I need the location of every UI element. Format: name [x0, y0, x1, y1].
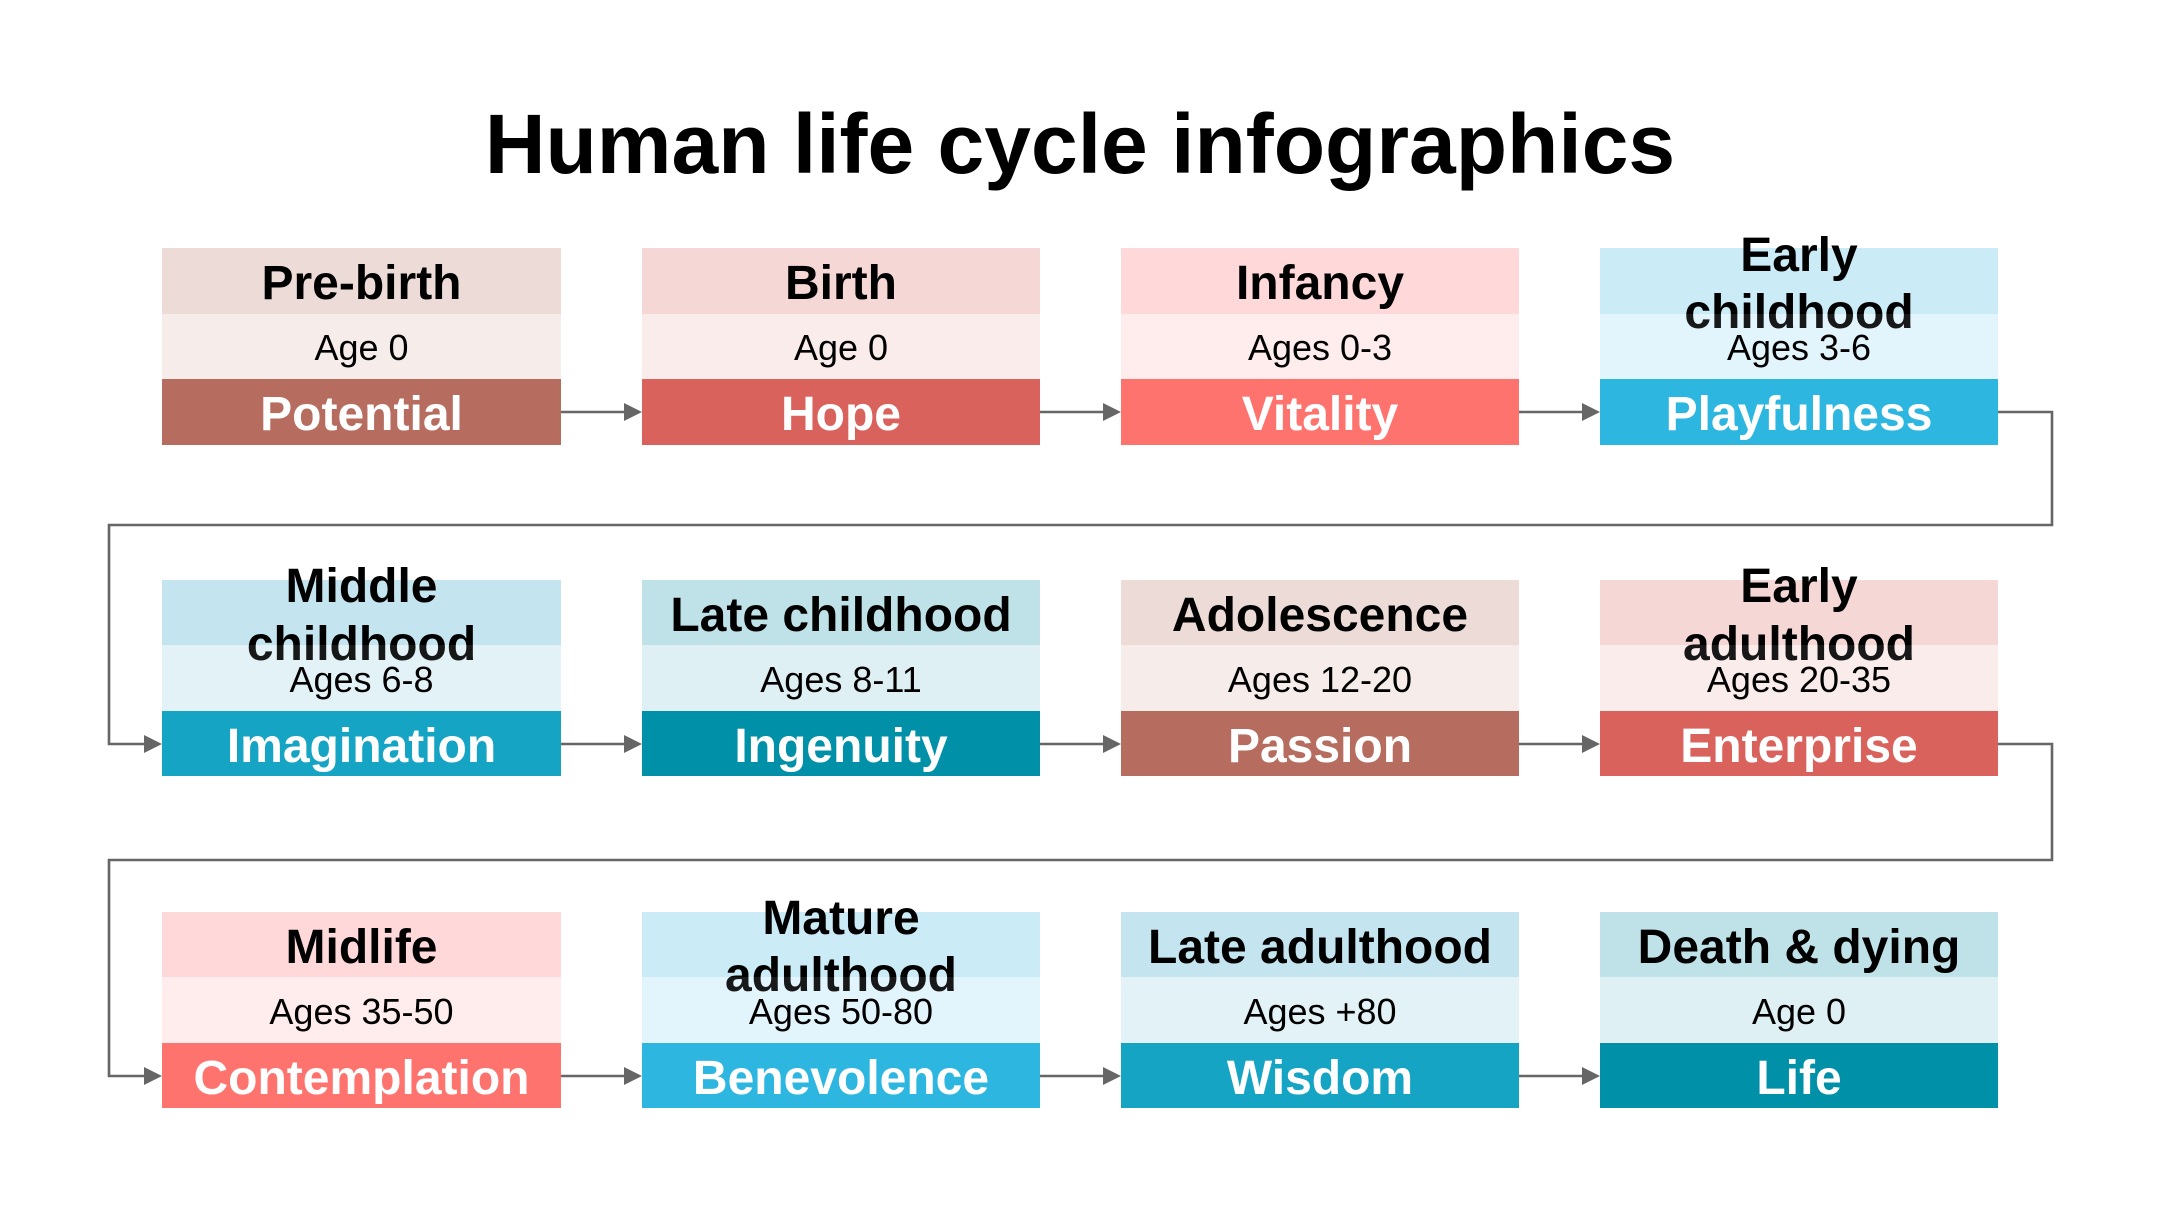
panel: infancy: Infancy	[1236, 257, 1404, 310]
panel: midlife: Contemplation	[194, 1052, 529, 1105]
panel: middle childhood: Imagination	[227, 720, 496, 773]
panel: late childhood: Late childhood	[670, 589, 1012, 642]
arrow: birth to infancy	[1040, 403, 1121, 421]
panel: death and dying: Death & dying	[1638, 921, 1960, 974]
panel: late childhood: Ages 8-11	[760, 659, 922, 700]
panel: pre-birth: Age 0	[314, 327, 409, 368]
panel: early childhood: childhood	[1684, 286, 1914, 339]
panel: adolescence: Passion	[1228, 720, 1412, 773]
panel: death and dying: Life	[1756, 1052, 1842, 1105]
arrow: late adulthood to death and dying	[1519, 1067, 1600, 1085]
panel: early childhood	[1600, 229, 1998, 445]
arrow: pre-birth to birth	[561, 403, 642, 421]
panel: early adulthood: Enterprise	[1680, 720, 1918, 773]
panel: late adulthood: Late adulthood	[1148, 921, 1492, 974]
panel: early adulthood	[1600, 560, 1998, 776]
panel: pre-birth: Pre-birth	[261, 257, 462, 310]
panel: mature adulthood	[642, 892, 1040, 1108]
panel: infancy	[1121, 248, 1519, 445]
arrow: mature adulthood to late adulthood	[1040, 1067, 1121, 1085]
arrow: early childhood to middle childhood	[109, 412, 2052, 753]
panel: early adulthood: Ages 20-35	[1707, 659, 1891, 700]
panel: adolescence	[1121, 580, 1519, 776]
arrow: adolescence to early adulthood	[1519, 735, 1600, 753]
panel: early childhood: Early	[1740, 229, 1858, 282]
panel: pre-birth: Potential	[260, 388, 463, 441]
panel: middle childhood	[162, 560, 561, 776]
panel: mature adulthood: Ages 50-80	[749, 991, 933, 1032]
panel: early adulthood: adulthood	[1683, 618, 1915, 671]
panel: adolescence: Ages 12-20	[1228, 659, 1412, 700]
panel: late adulthood: Wisdom	[1227, 1052, 1413, 1105]
panel: late childhood	[642, 580, 1040, 776]
panel: death and dying: Age 0	[1752, 991, 1846, 1032]
panel: early childhood: Ages 3-6	[1727, 327, 1871, 368]
panel: early childhood: Playfulness	[1666, 388, 1932, 441]
panel: late adulthood: Ages +80	[1243, 991, 1397, 1032]
arrow: infancy to early childhood	[1519, 403, 1600, 421]
panel: birth: Age 0	[794, 327, 888, 368]
panel: mature adulthood: adulthood	[725, 949, 957, 1002]
arrow: middle childhood to late childhood	[561, 735, 642, 753]
panel: middle childhood: Ages 6-8	[289, 659, 434, 700]
panel: middle childhood: Middle	[286, 560, 438, 613]
arrow: midlife to mature adulthood	[561, 1067, 642, 1085]
panel: adolescence: Adolescence	[1172, 589, 1468, 642]
panel: midlife: Midlife	[286, 921, 438, 974]
panel: midlife	[162, 912, 561, 1108]
arrow: late childhood to adolescence	[1040, 735, 1121, 753]
panel: birth: Birth	[785, 257, 897, 310]
panel: birth: Hope	[781, 388, 901, 441]
panel: late childhood: Ingenuity	[734, 720, 948, 773]
panel: infancy: Ages 0-3	[1248, 327, 1392, 368]
panel: infancy: Vitality	[1242, 388, 1399, 441]
panel: mature adulthood: Mature	[762, 892, 920, 945]
panel: middle childhood: childhood	[247, 618, 476, 671]
panel: late adulthood	[1121, 912, 1519, 1108]
title: Human life cycle infographics	[485, 97, 1675, 191]
arrow: early adulthood to midlife	[109, 744, 2052, 1085]
panel: death and dying	[1600, 912, 1998, 1108]
panel: birth	[642, 248, 1040, 445]
panel: early adulthood: Early	[1740, 560, 1858, 613]
panel: mature adulthood: Benevolence	[693, 1052, 989, 1105]
panel: midlife: Ages 35-50	[269, 991, 454, 1032]
panel: pre-birth	[162, 248, 561, 445]
